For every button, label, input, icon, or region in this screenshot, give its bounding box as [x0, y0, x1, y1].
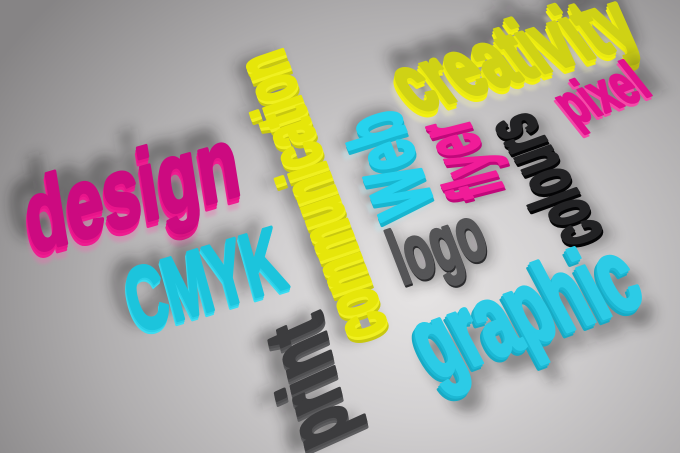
word: Web: Web: [323, 110, 449, 236]
word: colours: [469, 105, 627, 261]
word: colours: colours: [469, 105, 619, 257]
word: CMYK: CMYK: [114, 213, 294, 356]
word: Web: Web: [320, 99, 446, 225]
word: logo: logo: [377, 191, 498, 303]
word: CMYK: [102, 203, 295, 356]
word: logo: logo: [376, 189, 497, 301]
word: flyer: flyer: [401, 115, 522, 210]
word: design: design: [16, 108, 246, 278]
word: CMYK: CMYK: [102, 203, 282, 346]
word: design: design: [17, 105, 246, 275]
word: Web: Web: [327, 105, 453, 231]
word: design: design: [16, 117, 245, 287]
word: Web: Web: [326, 101, 452, 227]
word: logo: [376, 189, 501, 304]
word: flyer: flyer: [404, 114, 525, 209]
word: CMYK: CMYK: [114, 211, 295, 354]
word: flyer: flyer: [400, 112, 521, 207]
word: flyer: [400, 112, 525, 210]
word: colours: colours: [477, 109, 627, 261]
word: design: design: [16, 111, 245, 281]
word: logo: logo: [380, 192, 501, 304]
word: communication: [212, 42, 405, 355]
word: Web: [320, 99, 453, 236]
word: design: [1, 91, 246, 287]
word: colours: colours: [470, 108, 620, 260]
word: design: design: [1, 91, 230, 261]
word: CMYK: CMYK: [115, 209, 295, 352]
